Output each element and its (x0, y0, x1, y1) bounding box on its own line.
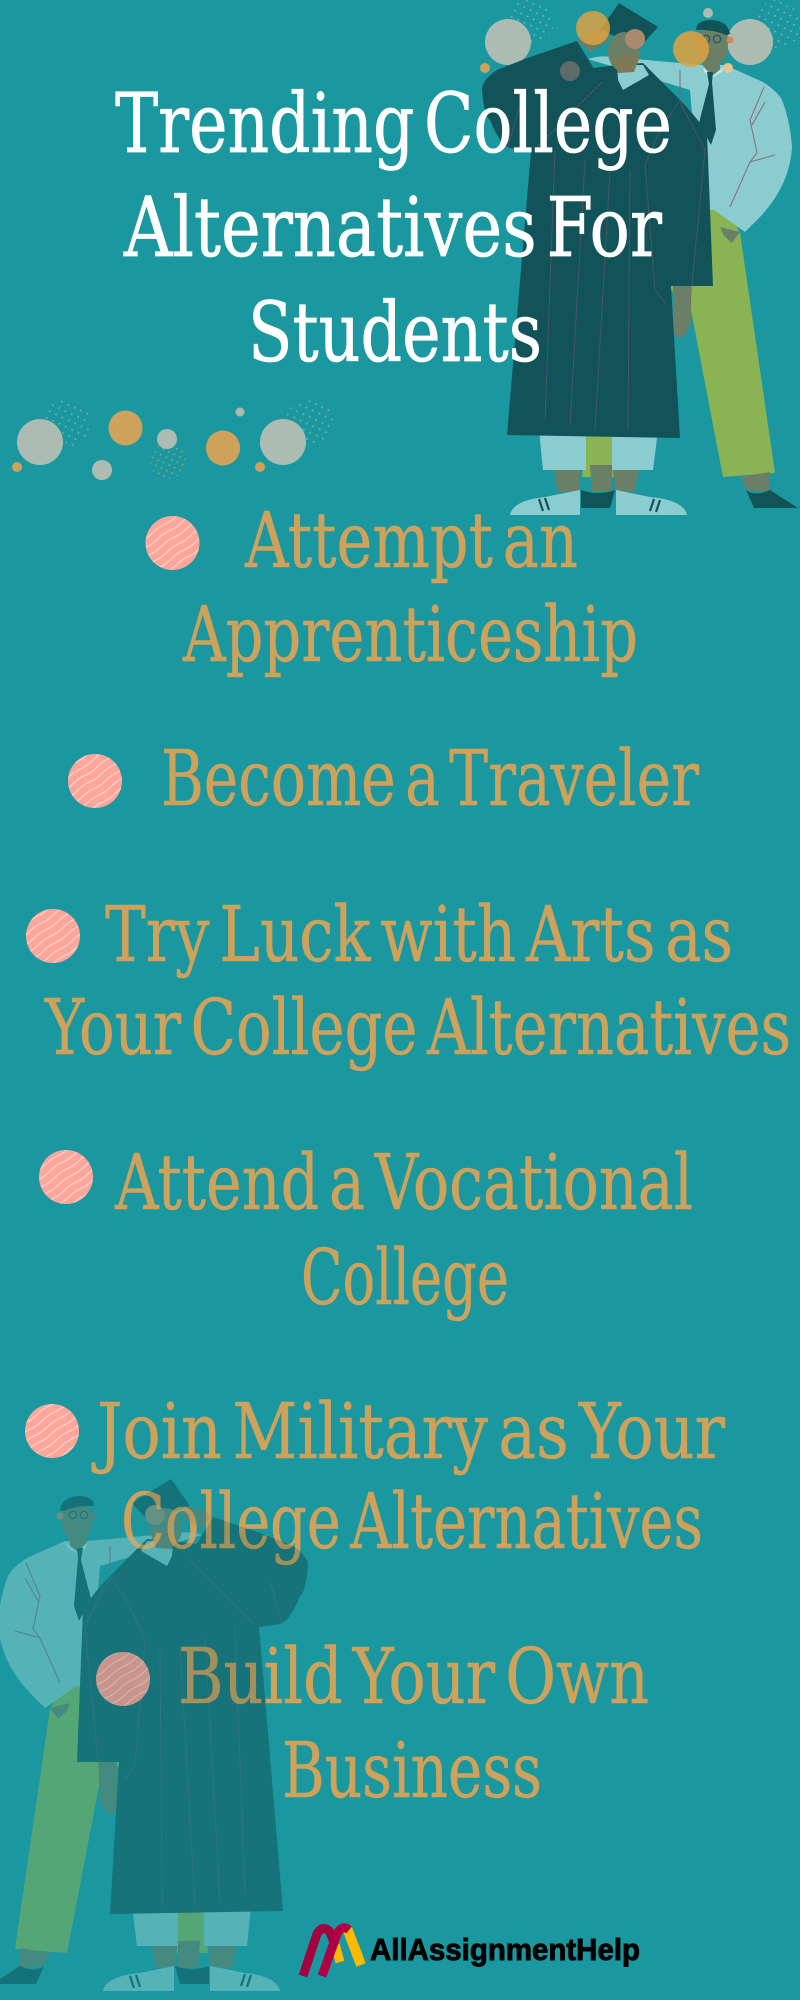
list item: own business: Build Your Own (178, 1633, 649, 1722)
title (115, 77, 672, 381)
list item: own business (96, 1633, 649, 1816)
list item: own business: Business (282, 1727, 542, 1816)
graduate: legs (553, 465, 640, 492)
decoration: blobs behind top figures (480, 0, 800, 73)
friend: hanging hand (673, 284, 691, 338)
graduate: gown folds (507, 82, 705, 430)
friend: collar and tie (703, 65, 726, 78)
graduate: gown (482, 41, 713, 438)
friend: shirt creases (680, 70, 775, 207)
decoration: translucent blobs over top figures (560, 11, 733, 81)
shoes (581, 490, 798, 508)
graduate: cap (600, 3, 658, 47)
title: Students (248, 286, 542, 381)
friend: shirt (588, 56, 792, 232)
illustration: mirrored figures, lower layer (0, 1479, 308, 1991)
friend: neck, head, hair (703, 58, 720, 76)
list item: apprenticeship: Apprenticeship (182, 591, 638, 680)
logo mark (303, 1928, 361, 1976)
friend: trousers (671, 205, 775, 477)
title: Trending College (115, 77, 672, 172)
illustration: mirrored figures, upper translucent layer (0, 1479, 308, 1991)
list item: apprenticeship (146, 497, 638, 680)
list item: arts (26, 891, 791, 1073)
decoration: dots and blobs row under title (12, 399, 333, 480)
graduate: trousers (539, 430, 658, 470)
list item: vocational college (39, 1139, 693, 1323)
friend: hand in pocket (720, 227, 740, 243)
graduate: collar (617, 65, 649, 90)
list item: apprenticeship: Attempt an (244, 497, 578, 586)
title: Alternatives For (123, 181, 663, 276)
list item: military (25, 1388, 725, 1567)
list item: vocational college: College (301, 1234, 509, 1323)
logo: AllAssignmentHelp (303, 1928, 640, 1976)
graduate: hand and face (577, 30, 610, 52)
illustration: graduate and friend (482, 3, 798, 515)
logo wordmark: AllAssignmentHelp (370, 1932, 640, 1967)
